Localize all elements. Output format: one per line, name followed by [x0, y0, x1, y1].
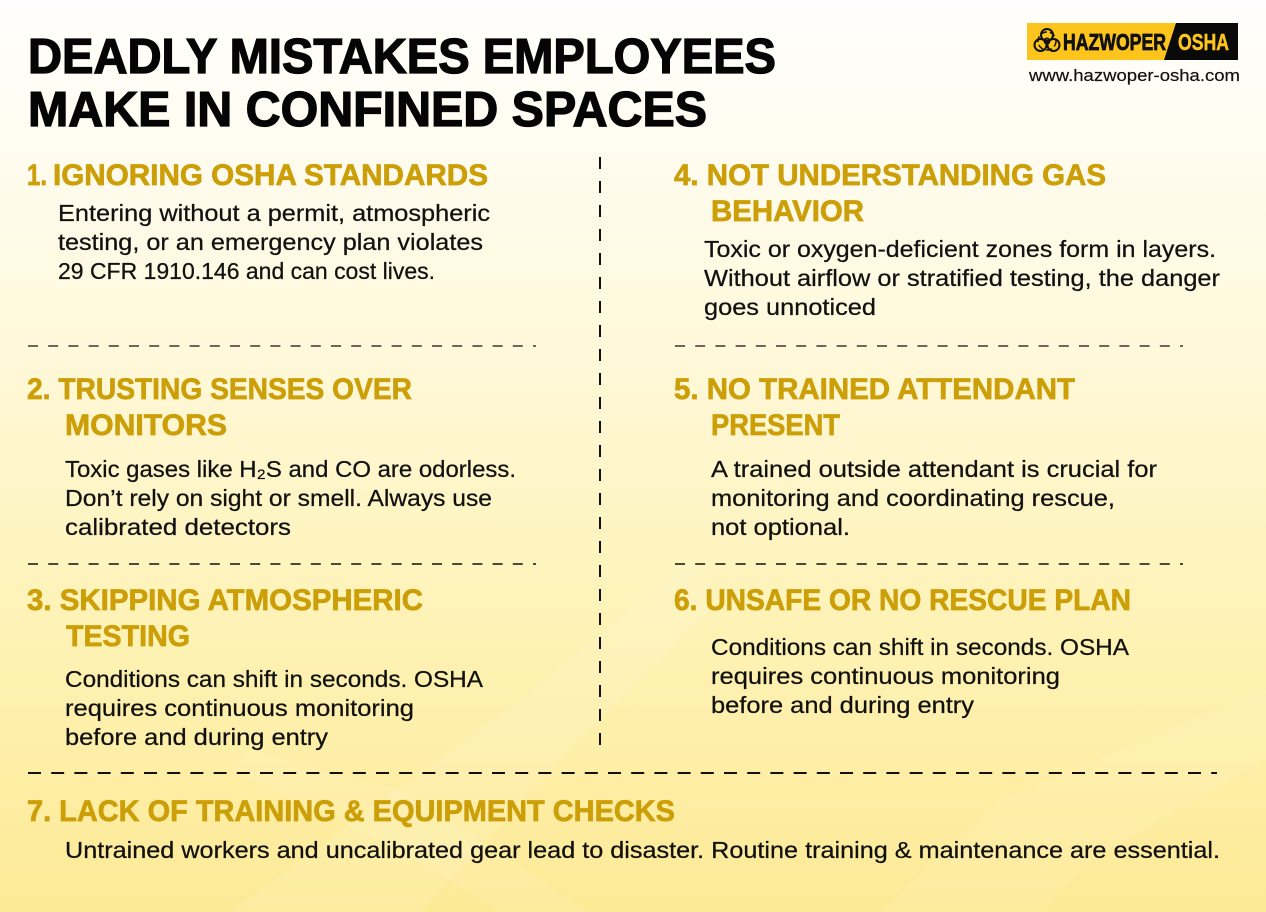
section 3: skipping atmospheric testing: Conditions can shift in seconds. OSHA [65, 666, 484, 692]
section 3: skipping atmospheric testing: before and during entry [65, 724, 329, 750]
section 2: trusting senses over monitors: MONITORS [65, 409, 227, 442]
section 3: skipping atmospheric testing: requires continuous monitoring [65, 695, 414, 721]
section 4: not understanding gas behavior: Toxic or oxygen-deficient zones form in layers. [704, 236, 1216, 262]
section 1: ignoring OSHA standards: 1. [27, 159, 47, 192]
section 6: unsafe or no rescue plan: before and during entry [711, 692, 975, 718]
section 5: no trained attendant present: 5. NO TRAINED ATTENDANT [674, 373, 1075, 406]
title: MAKE IN CONFINED SPACES [28, 83, 707, 137]
title: DEADLY MISTAKES EMPLOYEES [28, 30, 776, 84]
logo: Hazwoper OSHA: OSHA [1178, 29, 1229, 55]
section 1: ignoring OSHA standards: testing, or an emergency plan violates [58, 229, 483, 255]
section 2: trusting senses over monitors: Don’t rely on sight or smell. Always use [65, 485, 492, 511]
section 4: not understanding gas behavior [674, 159, 1220, 320]
section 4: not understanding gas behavior: goes unnoticed [704, 294, 876, 320]
section 3: skipping atmospheric testing [27, 584, 484, 750]
section 1: ignoring OSHA standards [27, 159, 490, 284]
section 7: lack of training and equipment checks [27, 795, 1220, 863]
logo: Hazwoper OSHA: www.hazwoper-osha.com [1028, 66, 1240, 85]
section 2: trusting senses over monitors: calibrated detectors [65, 514, 291, 540]
section 5: no trained attendant present: monitoring and coordinating rescue, [711, 485, 1115, 511]
section 6: unsafe or no rescue plan [674, 584, 1131, 718]
logo: Hazwoper OSHA [1027, 23, 1240, 85]
title [28, 30, 776, 137]
section 7: lack of training and equipment checks: 7. LACK OF TRAINING & EQUIPMENT CHECKS [27, 795, 675, 828]
section 2: trusting senses over monitors: 2. TRUSTING SENSES OVER [27, 373, 412, 406]
section 5: no trained attendant present: A trained outside attendant is crucial for [711, 456, 1157, 482]
section 6: unsafe or no rescue plan: Conditions can shift in seconds. OSHA [711, 634, 1130, 660]
section 3: skipping atmospheric testing: 3. SKIPPING ATMOSPHERIC [27, 584, 423, 617]
section 5: no trained attendant present [674, 373, 1157, 540]
section 6: unsafe or no rescue plan: 6. UNSAFE OR NO RESCUE PLAN [674, 584, 1131, 617]
section 6: unsafe or no rescue plan: requires continuous monitoring [711, 663, 1060, 689]
section 4: not understanding gas behavior: BEHAVIOR [711, 195, 864, 228]
section 1: ignoring OSHA standards: IGNORING OSHA STANDARDS [53, 159, 488, 192]
logo: Hazwoper OSHA: HAZWOPER [1063, 29, 1166, 55]
section 1: ignoring OSHA standards: Entering without a permit, atmospheric [58, 200, 490, 226]
section 2: trusting senses over monitors: Toxic gases like H₂S and CO are odorless. [65, 456, 516, 482]
section 5: no trained attendant present: PRESENT [711, 409, 840, 442]
section 4: not understanding gas behavior: Without airflow or stratified testing, the danger [704, 265, 1220, 291]
section 5: no trained attendant present: not optional. [711, 514, 850, 540]
section 7: lack of training and equipment checks: Untrained workers and uncalibrated gear lead to disaster. Routine training & maintenance are essential. [65, 837, 1220, 863]
section 4: not understanding gas behavior: 4. NOT UNDERSTANDING GAS [674, 159, 1106, 192]
icon: biohazard [1034, 29, 1060, 51]
dividers [28, 157, 1217, 773]
section 3: skipping atmospheric testing: TESTING [66, 620, 190, 653]
section 1: ignoring OSHA standards: 29 CFR 1910.146 and can cost lives. [58, 258, 435, 284]
section 2: trusting senses over monitors [27, 373, 516, 540]
